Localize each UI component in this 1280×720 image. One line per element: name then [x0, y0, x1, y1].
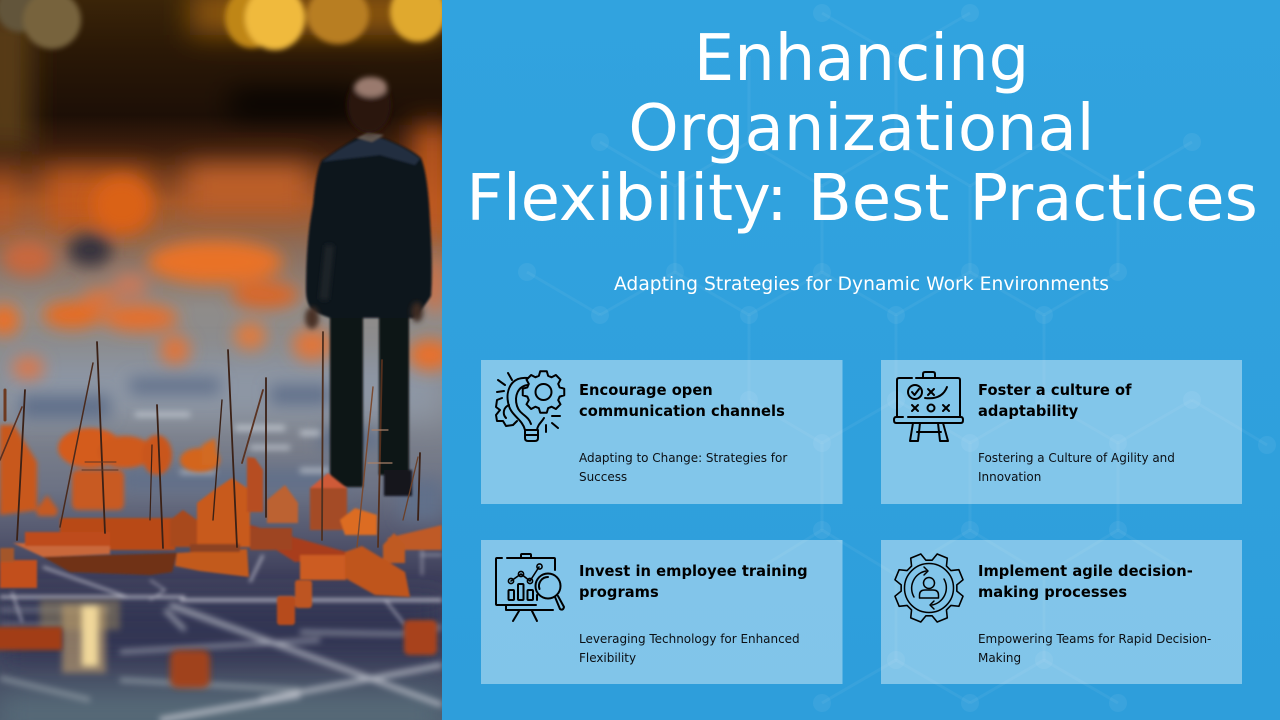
panel: Encourage open communication channels [481, 360, 842, 504]
card text: Empowering Teams for Rapid Decision- [978, 632, 1211, 646]
card heading: communication channels [579, 403, 785, 420]
card text: Adapting to Change: Strategies for [579, 451, 787, 465]
icon: lightbulb with gears [496, 371, 564, 441]
distant orange buildings [0, 425, 220, 516]
card text: Flexibility [579, 651, 636, 665]
ship masts and rigging [0, 332, 420, 548]
hexagon network pattern [518, 4, 1276, 712]
card heading: Invest in employee training [579, 563, 808, 580]
icon: strategy board on easel [894, 372, 963, 441]
icon: gear with person [884, 543, 974, 633]
panel: blue background [442, 0, 1280, 720]
card text: Innovation [978, 470, 1041, 484]
card heading: programs [579, 584, 659, 601]
card text: Making [978, 651, 1021, 665]
bottom map: streets on dark ground [0, 548, 442, 625]
panel: Invest in employee training programs [481, 540, 842, 684]
card heading: Foster a culture of [978, 382, 1132, 399]
man in suit, seen from behind [305, 77, 432, 496]
bokeh lights [0, 0, 446, 50]
subtitle: Adapting Strategies for Dynamic Work Environments [614, 274, 1109, 295]
card heading: Encourage open [579, 382, 713, 399]
card text: Leveraging Technology for Enhanced [579, 632, 800, 646]
blurred colour fields [0, 0, 452, 720]
card heading: making processes [978, 584, 1127, 601]
card heading: Implement agile decision- [978, 563, 1193, 580]
title: Enhancing [694, 22, 1029, 96]
foreground blurred markers and blocks [277, 580, 312, 625]
water reflection of lights [40, 600, 120, 673]
grey-blue map mid-ground [20, 378, 442, 520]
card text: Success [579, 470, 627, 484]
title: Organizational [628, 92, 1095, 166]
card text: Fostering a Culture of Agility and [978, 451, 1175, 465]
title: Flexibility: Best Practices [466, 162, 1258, 236]
panel: Implement agile decision-making processes [881, 540, 1242, 684]
icon: presentation chart with magnifier [496, 554, 564, 621]
harbour buildings and ship hulls [0, 457, 442, 597]
card heading: adaptability [978, 403, 1079, 420]
panel: Foster a culture of adaptability [881, 360, 1242, 504]
photo: businessman overlooking orange miniature harbour city [0, 0, 452, 720]
